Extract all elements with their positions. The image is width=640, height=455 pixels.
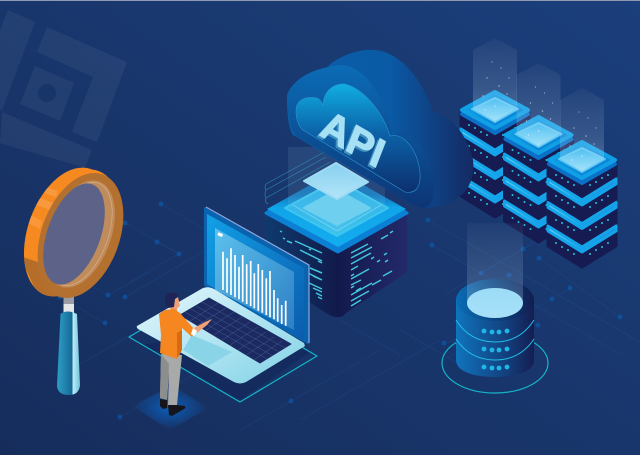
cylinder top <box>456 279 534 321</box>
face <box>171 297 180 309</box>
server towers <box>461 38 616 267</box>
circuit network background <box>60 193 640 430</box>
shirt <box>159 309 195 359</box>
status dots <box>482 329 509 370</box>
hair <box>165 293 178 308</box>
cube top lip <box>266 173 407 252</box>
watermark logo <box>0 10 127 168</box>
outer rim <box>7 155 129 309</box>
tower 1 <box>461 38 529 217</box>
platform under laptop <box>129 327 317 402</box>
database cylinder <box>442 223 548 393</box>
laptop shadow <box>140 330 310 400</box>
API label: API <box>313 102 389 178</box>
magnifying glass <box>24 168 124 395</box>
handle neck <box>64 296 74 317</box>
keyboard <box>180 298 291 363</box>
cube inner layer <box>285 180 388 236</box>
outer rim thickness <box>16 157 136 309</box>
base <box>137 287 305 384</box>
code lines left face <box>280 231 322 299</box>
floating layer <box>304 163 368 199</box>
front ring <box>22 161 139 310</box>
code lines right face <box>351 231 393 306</box>
beam <box>467 223 523 318</box>
cloud front plate <box>287 65 434 208</box>
shoes <box>160 399 167 409</box>
bar chart <box>223 248 286 326</box>
handle grip <box>57 312 80 395</box>
ground ring <box>442 333 548 393</box>
neck <box>170 305 177 314</box>
cube right face <box>338 212 407 317</box>
cuff <box>191 328 197 336</box>
person <box>132 293 212 430</box>
screen back <box>205 208 308 343</box>
keyboard keys grid <box>185 302 285 360</box>
inner tan ring <box>32 171 128 297</box>
laptop <box>137 207 309 384</box>
tower 2 <box>504 63 572 242</box>
cylinder body <box>456 300 534 377</box>
band lines <box>456 320 534 360</box>
cloud face <box>296 84 420 192</box>
hand and forearm <box>194 319 212 333</box>
cube top <box>267 170 406 247</box>
thin outlines <box>265 151 330 204</box>
circuit nodes <box>58 202 622 420</box>
beam <box>288 147 385 232</box>
floor glow <box>132 385 208 430</box>
chart marker <box>217 232 223 237</box>
API cloud <box>287 50 473 208</box>
cube server <box>265 147 407 317</box>
lens <box>31 175 117 293</box>
trackpad <box>183 335 232 366</box>
cloud extruded back <box>287 50 473 208</box>
middle layer <box>304 190 370 225</box>
legs <box>160 354 182 405</box>
cube left face <box>266 212 338 317</box>
API label: API <box>315 101 391 177</box>
rim highlights <box>24 188 58 296</box>
tower 3 <box>548 88 616 267</box>
screen inner panel <box>215 228 294 330</box>
screen <box>207 214 304 340</box>
